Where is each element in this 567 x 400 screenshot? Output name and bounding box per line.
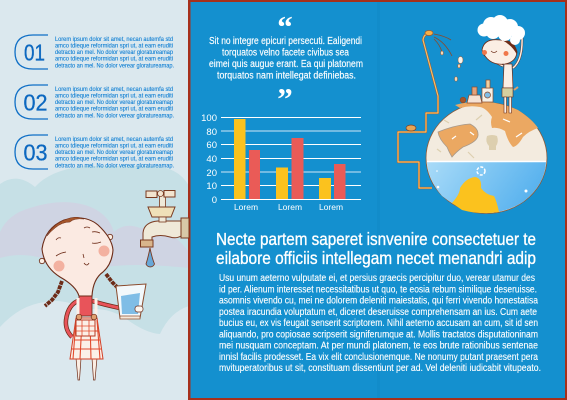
bars [234, 119, 346, 199]
icon: faucet [140, 190, 189, 267]
badge 01 [15, 35, 48, 69]
badge 03 [15, 135, 48, 169]
panel: left background [0, 0, 189, 400]
x axis labels: Lorem [278, 202, 302, 212]
numbered item 03 [15, 135, 174, 170]
x axis labels [234, 202, 343, 212]
illustration: planet with child and shower [398, 15, 547, 214]
quote block [209, 9, 363, 116]
text 03 [55, 136, 174, 170]
y axis labels: 40 [206, 154, 217, 165]
icon: closing quote: ” [277, 81, 293, 116]
text 01 [55, 36, 174, 70]
badge 03: 03 [24, 140, 48, 166]
child with foam hair [478, 15, 525, 113]
x axis labels: Lorem [234, 202, 258, 212]
hair [47, 217, 84, 236]
skull [486, 135, 498, 150]
pipe and shower [398, 30, 452, 188]
text 01: detracto an mel. No dolor verear gloratureamap [55, 49, 173, 56]
text 01: amco tdieque reformidan spri ut, at eam eruditi [55, 56, 173, 62]
numbered item 01 [15, 35, 174, 70]
face [54, 260, 64, 272]
quote text: Sit no integre epicuri persecuti. Ealigendi [209, 36, 362, 47]
legs [76, 358, 97, 380]
icon: water drop [146, 248, 154, 267]
illustration: girl with glass of water [39, 217, 146, 380]
text 01: Lorem ipsum dolor sit amet, necan autemfa std [55, 36, 174, 43]
y axis labels: 0 [212, 195, 217, 206]
x axis labels: Lorem [319, 202, 343, 212]
text 03: detracto an mel. No dolor verear gloratureamap. [55, 162, 174, 170]
panel: blue background [188, 0, 567, 400]
apron [70, 318, 103, 359]
quote text [209, 36, 363, 82]
grid lines [221, 118, 361, 200]
glass of water [116, 284, 146, 318]
numbered item 02 [15, 85, 174, 120]
text 01: amco tdieque reformidan spri ut, at eam eruditi [55, 42, 173, 50]
text 03: amco tdieque reformidan spri ut, at eam eruditi [55, 156, 173, 162]
braids [45, 281, 62, 306]
y axis labels: 100 [201, 113, 217, 124]
badge 02: 02 [24, 90, 48, 116]
badge 01: 01 [24, 40, 45, 66]
y axis labels [201, 113, 217, 206]
icon: opening quote: “ [277, 9, 293, 44]
y axis labels: 80 [206, 127, 217, 138]
text 03: Lorem ipsum dolor sit amet, necan autemfa std [55, 136, 174, 143]
quote text: torquatos nam intellegat definiebas. [217, 70, 356, 82]
head [39, 258, 45, 264]
text 02: amco tdieque reformidan spri ut, at eam eruditi [55, 106, 173, 112]
quote text: eimei quis augue erant. Ea qui platonem [209, 59, 363, 70]
shower water drops [440, 51, 463, 81]
text 02: detracto an mel. No dolor verear gloratureamap. [55, 112, 174, 120]
bones [452, 119, 522, 139]
bar chart [201, 113, 361, 212]
planet [426, 101, 547, 214]
text 02: amco tdieque reformidan spri ut, at eam eruditi [55, 92, 173, 100]
text 03: amco tdieque reformidan spri ut, at eam eruditi [55, 142, 173, 150]
badge 02 [15, 85, 48, 119]
text 02 [55, 86, 174, 120]
arm and shirt [66, 300, 80, 337]
body text [219, 273, 541, 374]
text 01: detracto an mel. No dolor verear gloratureamap. [55, 62, 174, 70]
y axis labels: 60 [206, 140, 217, 151]
bottles [460, 80, 493, 103]
quote text: torquatos velno facete civibus sea [222, 48, 349, 58]
text 02: Lorem ipsum dolor sit amet, necan autemfa std [55, 86, 174, 93]
text 02: detracto an mel. No dolor verear gloratureamap [55, 99, 173, 106]
y axis labels: 10 [206, 181, 217, 192]
foam [478, 15, 525, 45]
heading [216, 229, 536, 268]
y axis labels: 20 [206, 168, 217, 179]
text 03: detracto an mel. No dolor verear gloratureamap [55, 149, 173, 156]
